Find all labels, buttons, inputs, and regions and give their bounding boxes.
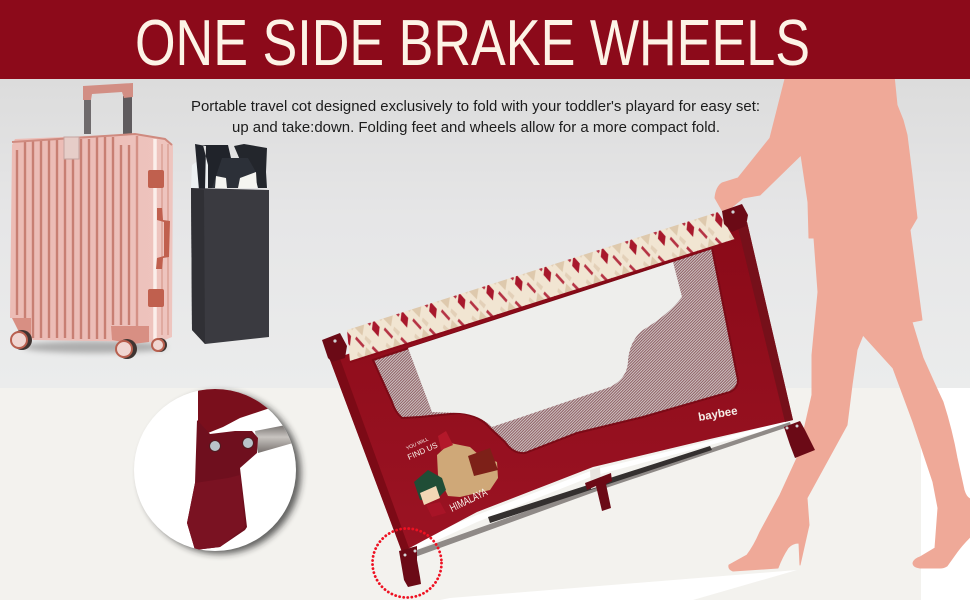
mesh window: [373, 248, 738, 453]
himalaya llama artwork: YOU WILL: [405, 437, 430, 452]
suitcase latches and side handle: [12, 170, 170, 344]
cot underside frame: [407, 420, 791, 557]
himalaya llama artwork: FIND US: [406, 441, 439, 462]
description text: up and take:down. Folding feet and wheels allow for a more compact fold.: [232, 120, 720, 136]
description text: Portable travel cot designed exclusively to fold with your toddler's playard for easy set:: [191, 99, 760, 115]
suitcase: [10, 83, 173, 359]
title band: [0, 0, 970, 79]
travel cot: [322, 204, 815, 587]
lens shadow: [139, 392, 301, 554]
himalaya llama artwork: [405, 431, 498, 517]
wheel foot, right side: [784, 421, 815, 458]
suitcase shadow: [23, 341, 167, 353]
suitcase handle: [83, 83, 133, 134]
red dotted callout circle: [372, 528, 442, 598]
description text: [191, 99, 760, 136]
folded cot contents: [191, 144, 268, 190]
printed valance: [347, 212, 735, 362]
suitcase wheels: [11, 330, 167, 359]
himalaya llama artwork: HIMALAYA: [448, 486, 490, 515]
woman silhouette pushing the cot: [715, 75, 970, 571]
magnified wheel detail: [134, 385, 301, 554]
baybee logo: baybee: [697, 405, 739, 424]
suitcase ribs: [17, 136, 168, 340]
suitcase label plate: [64, 137, 79, 159]
lens disc: [134, 389, 296, 551]
window opening: [408, 262, 682, 427]
wheel foot, brake side: [399, 546, 421, 587]
zoomed foot parts: [187, 385, 293, 550]
centre foot: [585, 473, 612, 511]
corner caps: [322, 204, 748, 362]
suitcase body: [10, 134, 173, 342]
cot body fabric: [330, 222, 793, 552]
folded cot carry bag: [191, 144, 269, 344]
bag body: [191, 188, 269, 344]
heading: ONE SIDE BRAKE WHEELS: [135, 6, 810, 79]
